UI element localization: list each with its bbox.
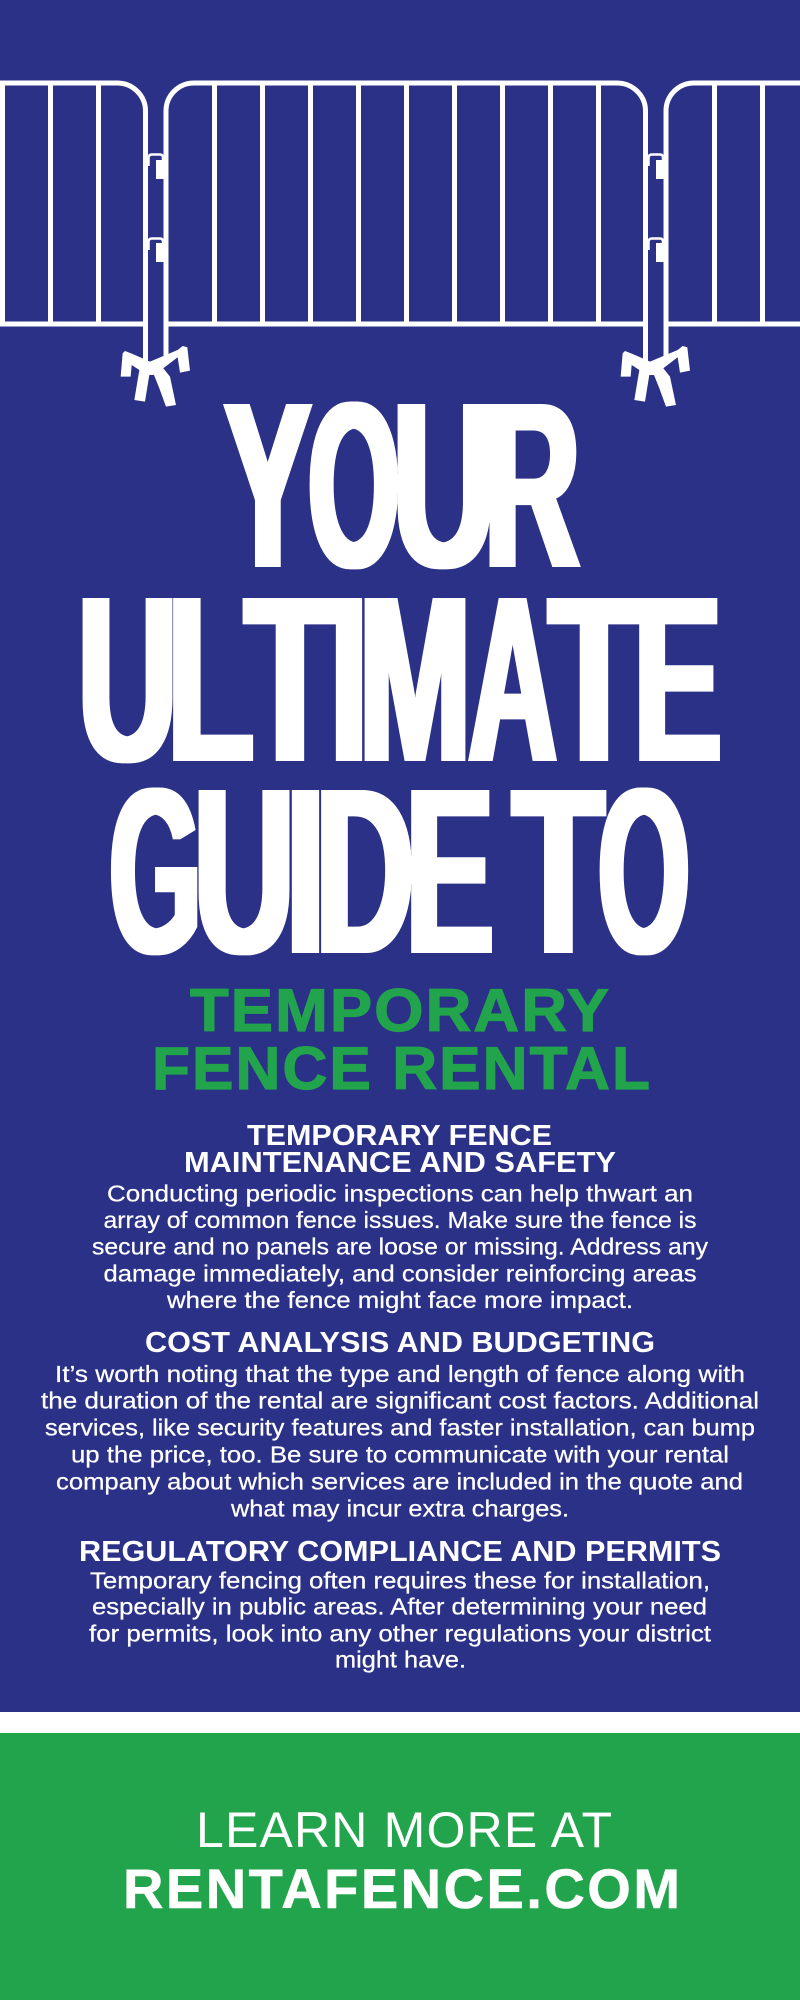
title line: ULTIMATE: T [548, 547, 640, 812]
icon: crowd-control fence barrier [0, 83, 800, 407]
text block: cost analysis and budgeting: services, like security features and faster installation, can bump [45, 1415, 755, 1441]
text block: regulatory compliance and permits [89, 1568, 712, 1672]
subtitle: FENCE RENTAL [152, 1035, 652, 1102]
title line: ULTIMATE: M [359, 547, 471, 812]
title line: ULTIMATE: U [78, 547, 177, 812]
text block: cost analysis and budgeting: the duration of the rental are significant cost factors. Additional [41, 1388, 759, 1414]
section: maintenance and safety [92, 1120, 709, 1313]
section: regulatory compliance and permits [79, 1536, 721, 1672]
title line: GUIDE TO: E [406, 739, 494, 1004]
title line: ULTIMATE: T [244, 547, 336, 812]
text block: cost analysis and budgeting: It’s worth noting that the type and length of fence along with [55, 1361, 745, 1387]
text block: regulatory compliance and permits: especially in public areas. After determining your need [92, 1594, 707, 1620]
icon: left fence foot [121, 346, 190, 407]
white divider band [0, 1712, 800, 1733]
call to action: website: RENTAFENCE.COM [123, 1857, 680, 1920]
title line: ULTIMATE: L [167, 547, 254, 812]
title line: YOUR: R [484, 353, 580, 618]
subtitle [152, 977, 652, 1102]
panel: green call to action [0, 1733, 800, 2000]
heading: cost analysis and budgeting: COST ANALYSIS AND BUDGETING [145, 1327, 655, 1359]
title line: ULTIMATE: E [634, 547, 722, 812]
text block: regulatory compliance and permits: Temporary fencing often requires these for installation, [90, 1568, 710, 1594]
title line: GUIDE TO: T [512, 739, 604, 1004]
text block: maintenance and safety: where the fence might face more impact. [166, 1287, 633, 1313]
text block: regulatory compliance and permits: might have. [335, 1646, 466, 1672]
text block: maintenance and safety [92, 1180, 709, 1313]
heading: maintenance and safety: MAINTENANCE AND SAFETY [184, 1147, 616, 1179]
heading: regulatory compliance and permits: REGULATORY COMPLIANCE AND PERMITS [79, 1536, 721, 1568]
fence panel: right [666, 83, 800, 362]
title line: GUIDE TO: D [316, 739, 414, 1004]
text block: cost analysis and budgeting: company about which services are included in the quote and [56, 1469, 743, 1495]
text block: regulatory compliance and permits: for permits, look into any other regulations your district [89, 1620, 712, 1646]
heading: maintenance and safety: TEMPORARY FENCE [247, 1120, 552, 1152]
text block: cost analysis and budgeting: up the price, too. Be sure to communicate with your rental [71, 1441, 729, 1467]
call to action: learn more at: LEARN MORE AT [196, 1802, 612, 1858]
fence panel: middle [166, 83, 646, 362]
icon: left connector hooks [148, 154, 165, 262]
title line: GUIDE TO: G [110, 739, 201, 1004]
text block: maintenance and safety: secure and no panels are loose or missing. Address any [92, 1234, 709, 1260]
title line: YOUR: Y [224, 353, 311, 618]
title [78, 353, 722, 1004]
subtitle: TEMPORARY [190, 977, 611, 1044]
title line: GUIDE TO: U [194, 739, 294, 1004]
section: cost analysis and budgeting [41, 1327, 759, 1521]
icon: right connector hooks [648, 154, 665, 262]
text block: maintenance and safety: Conducting periodic inspections can help thwart an [107, 1180, 693, 1206]
icon: right fence foot [621, 346, 690, 407]
text block: cost analysis and budgeting: what may incur extra charges. [230, 1495, 569, 1521]
title: O [598, 739, 690, 1004]
title line: ULTIMATE: A [468, 547, 557, 812]
text block: cost analysis and budgeting [41, 1361, 759, 1521]
title line: YOUR: O [308, 353, 400, 618]
title line: GUIDE TO: I [286, 739, 325, 1004]
fence panel: left [0, 83, 146, 362]
text block: maintenance and safety: array of common fence issues. Make sure the fence is [104, 1207, 696, 1233]
title line: ULTIMATE: I [330, 547, 368, 812]
title line: YOUR: U [392, 353, 496, 618]
text block: maintenance and safety: damage immediately, and consider reinforcing areas [104, 1260, 696, 1286]
heading: maintenance and safety [184, 1120, 616, 1179]
